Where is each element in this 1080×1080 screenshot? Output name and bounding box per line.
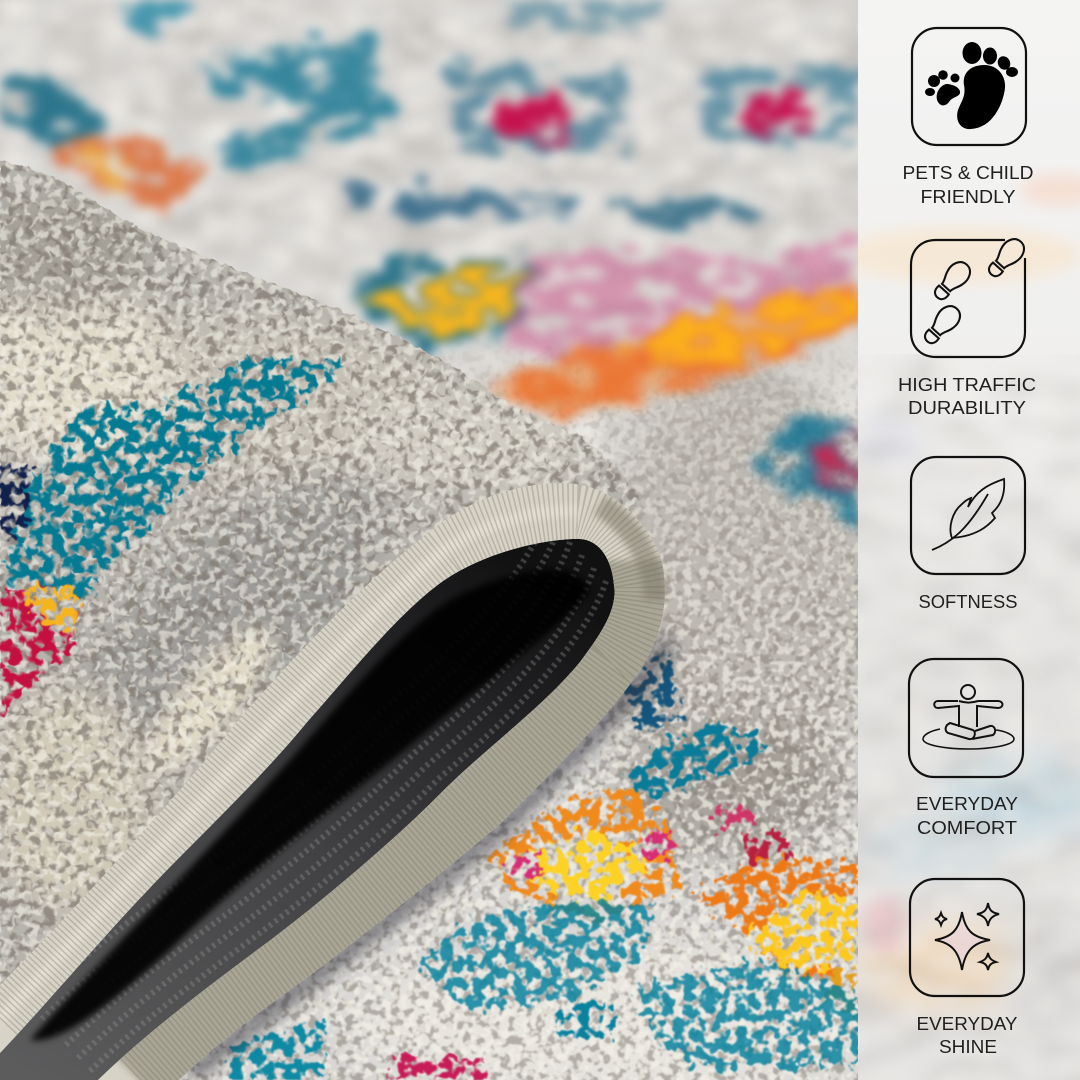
label: softness: SOFTNESS [918,591,1018,612]
in-focus pattern motifs [225,645,857,1080]
label: high traffic durability [898,374,1036,418]
black shadow inside the roll [30,569,590,1040]
label: everyday shine: EVERYDAY [916,1013,1018,1034]
rug stitched binding edge [0,483,665,1080]
rug dark underside [0,516,630,1080]
icon: feather [911,457,1025,574]
icon: meditating person [909,659,1023,777]
label: pets & child friendly [902,162,1034,207]
label: everyday shine: SHINE [939,1036,997,1057]
label: everyday comfort: COMFORT [917,817,1017,838]
icon: footprints [911,235,1029,357]
feature: everyday comfort [909,659,1023,838]
icon: sparkles [910,879,1024,996]
label: everyday shine [916,1013,1018,1057]
out-of-focus pattern motifs [0,0,857,525]
shadow under rolled rug [190,640,670,1075]
feature: softness [911,457,1025,612]
orange band underglow [490,285,857,415]
label: high traffic durability: HIGH TRAFFIC [898,374,1036,395]
rolled rug top surface [0,160,644,985]
label: everyday comfort: EVERYDAY [916,793,1018,814]
feature: pets & child friendly [902,28,1034,207]
feature: everyday shine [910,879,1024,1057]
icon: paw and baby foot [912,28,1026,145]
label: everyday comfort [916,793,1018,838]
label: pets & child friendly: FRIENDLY [920,186,1016,207]
feature: high traffic durability [898,235,1036,418]
label: high traffic durability: DURABILITY [908,397,1026,418]
panel: blurred feature sidebar [840,0,1080,1080]
label: pets & child friendly: PETS & CHILD [902,162,1034,183]
saturated motif centres [355,92,857,495]
